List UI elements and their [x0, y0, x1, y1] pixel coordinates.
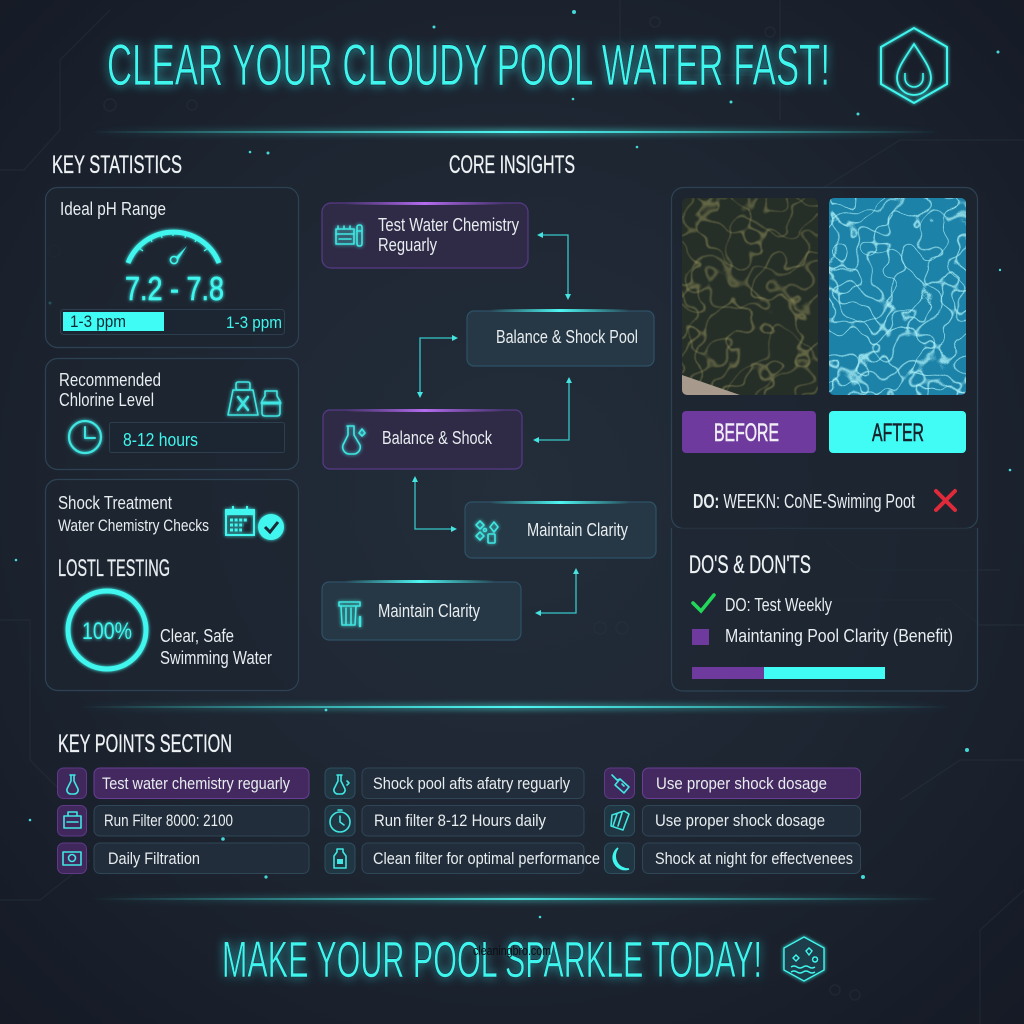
- dos heading: DO'S & DON'TS: [689, 551, 811, 579]
- arrow: balance shock to balance pool: [533, 377, 572, 443]
- icon: green check: [693, 595, 714, 611]
- hours bar: 8-12 hours: [123, 430, 198, 450]
- heading: key points: KEY POINTS SECTION: [58, 730, 232, 758]
- ppm bar: 1-3 ppm: [70, 312, 126, 331]
- arrow: balance pool to balance shock: [417, 335, 458, 398]
- photo: cloudy pool: [682, 198, 818, 400]
- item: proper dosage: Use proper shock dosage: [656, 774, 827, 793]
- heading: core insights: CORE INSIGHTS: [449, 151, 575, 179]
- icon: sparkle water hexagon: [784, 937, 824, 981]
- item: clean filter: [325, 843, 600, 874]
- after button: AFTER: [872, 419, 924, 447]
- progress ring: 100%: [82, 618, 132, 645]
- divider: [80, 704, 950, 710]
- arrow: maintain left to maintain right: [535, 568, 579, 616]
- flow text: Balance & Shock Pool: [496, 327, 638, 347]
- item: proper dosage: [604, 768, 860, 798]
- item: daily filtration: Daily Filtration: [108, 849, 200, 868]
- divider: [90, 896, 940, 902]
- flow box: maintain clarity right: [465, 501, 656, 558]
- flow box: maintain clarity left: [322, 580, 521, 640]
- icon: chemical bag and bottle: [228, 382, 280, 416]
- icon: filter cartridge: [339, 602, 360, 626]
- item: shock at night: [604, 843, 860, 874]
- flow text: Maintain Clarity: [527, 520, 628, 540]
- item: run filter hours: [325, 806, 584, 836]
- purple square: [692, 629, 709, 645]
- before button: BEFORE: [714, 419, 779, 447]
- watermark: cleaningbro.com: [473, 944, 551, 958]
- item: run filter: [58, 806, 309, 836]
- arrow: test to balance pool: [537, 232, 571, 300]
- ppm bar: [60, 310, 284, 334]
- photo: clear pool: [829, 198, 966, 395]
- key points column 2: [325, 768, 600, 874]
- icon: calendar check: [226, 506, 284, 540]
- icon: sparkles: [476, 521, 498, 543]
- hours bar: [110, 422, 284, 452]
- after button: [829, 411, 966, 453]
- ph heading: Ideal pH Range: [60, 199, 166, 219]
- item: shock at night: Shock at night for effectvenees: [655, 849, 853, 868]
- ph value: 7.2 - 7.8: [125, 270, 224, 307]
- panel: before and after: [672, 188, 978, 528]
- item: run filter hours: Run filter 8-12 Hours daily: [374, 811, 546, 830]
- water chemistry text: Water Chemistry Checks: [58, 516, 209, 535]
- benefit progress bar: [692, 667, 885, 679]
- ppm bar: 1-3 ppm: [226, 313, 282, 332]
- flow box: balance and shock: [323, 409, 522, 469]
- benefit item: Maintaning Pool Clarity (Benefit): [725, 626, 953, 646]
- before button: [682, 411, 816, 453]
- panel: shock treatment and testing: [46, 480, 298, 690]
- icon: gauge: [128, 232, 219, 264]
- flow text: Maintain Clarity: [378, 601, 480, 621]
- chlorine heading: Chlorine Level: [59, 390, 154, 410]
- icon: red cross: [936, 491, 955, 510]
- chlorine heading: Recommended: [59, 370, 161, 390]
- icon: test kit: [336, 225, 362, 246]
- progress ring: [68, 591, 146, 669]
- do item: DO: Test Weekly: [725, 595, 832, 615]
- key points column 1: [58, 768, 309, 874]
- panel: recommended chlorine level: [46, 358, 298, 470]
- divider: [90, 129, 940, 135]
- flow text: Balance & Shock: [382, 428, 493, 448]
- item: test water: Test water chemistry reguarly: [102, 774, 290, 793]
- flow text: Test Water Chemistry: [378, 215, 519, 235]
- icon: flask: [343, 426, 365, 454]
- flow box: balance and shock pool: [467, 309, 654, 366]
- item: run filter: Run Filter 8000: 2100: [104, 811, 233, 830]
- shock treatment text: Shock Treatment: [58, 493, 172, 513]
- arrow: balance shock to maintain: [412, 476, 457, 532]
- do warning text: DO: WEEKN: CoNE-Swiming Poot: [693, 491, 915, 513]
- item: clean filter: Clean filter for optimal performance: [373, 849, 600, 868]
- item: shock pool: [325, 768, 584, 798]
- heading: key statistics: KEY STATISTICS: [52, 151, 182, 179]
- item: test water: [58, 768, 309, 798]
- key points column 3: [604, 768, 860, 874]
- clear safe text: Swimming Water: [160, 648, 272, 668]
- item: daily filtration: [58, 843, 309, 874]
- panel: dos and donts: [672, 528, 978, 691]
- item: proper dosage two: [604, 806, 860, 836]
- icon: water drop hexagon: [881, 28, 947, 103]
- flow box: test water chemistry: [322, 202, 528, 268]
- item: proper dosage two: Use proper shock dosage: [655, 811, 825, 830]
- panel: ideal pH range: [46, 188, 298, 348]
- icon: clock: [69, 421, 101, 453]
- footer call to action: [222, 931, 762, 988]
- clear safe text: Clear, Safe: [160, 626, 234, 646]
- flow text: Reguarly: [378, 235, 437, 255]
- testing heading: LOSTL TESTING: [58, 555, 170, 582]
- item: shock pool: Shock pool afts afatry reguarly: [373, 774, 570, 793]
